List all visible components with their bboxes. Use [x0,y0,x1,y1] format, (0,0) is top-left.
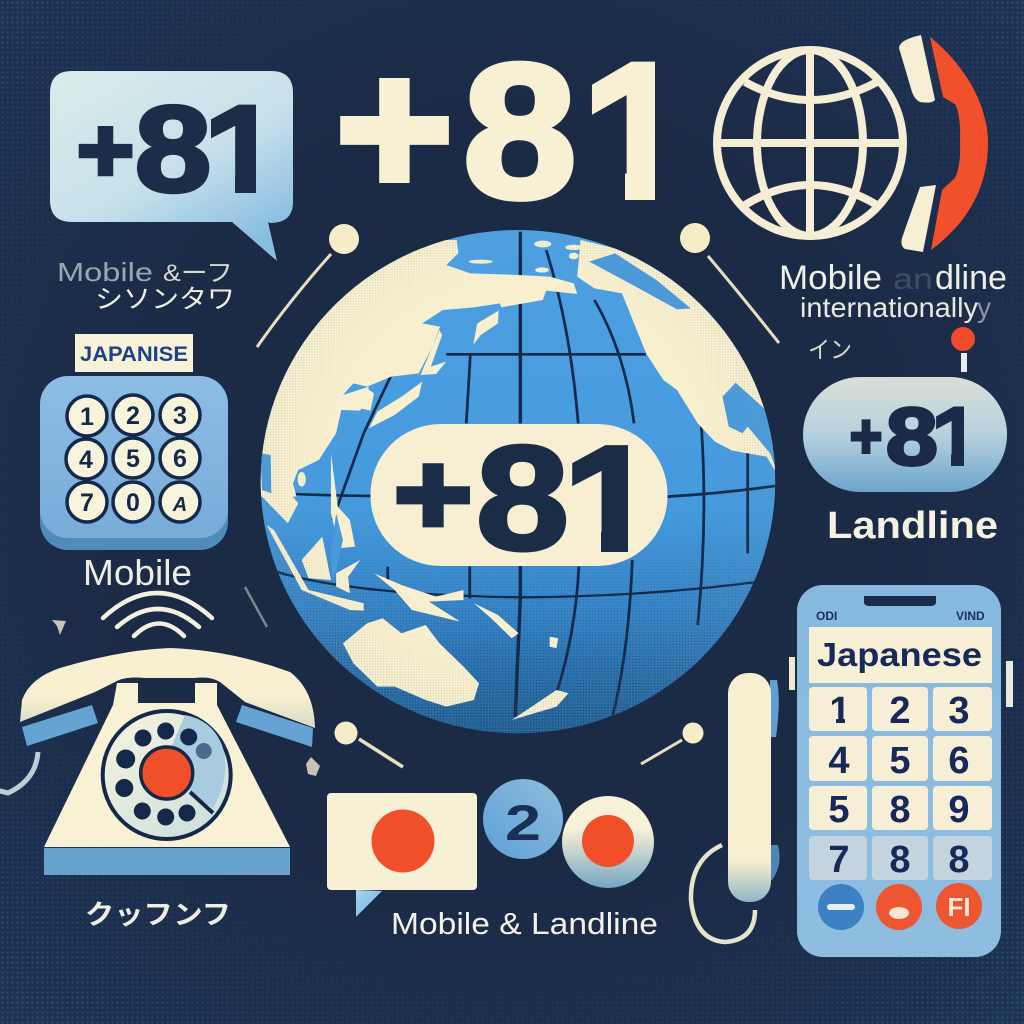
keypad digits: 1 [80,403,94,431]
grid lines [260,232,775,720]
pill number: 8 [476,416,569,581]
caption: mobile and katakana: Mobile [57,257,153,287]
keypad label: JAPANISE [80,343,188,366]
side buttons [789,657,795,690]
label: Mobile landline internationally: dline [935,259,1007,297]
flag sun [372,810,434,872]
key digits: 8 [948,839,970,881]
keypad digits: 4 [79,446,93,474]
keypad keys [66,395,200,522]
pill number: + [394,430,472,559]
pill number [850,406,964,467]
title: +81: + [336,22,453,235]
label: Landline: Landline [827,505,998,547]
bubble number: 8 [135,80,211,217]
small mark: right: イン [808,337,852,364]
pill number: 8 [886,390,938,482]
connector: bottom right [641,722,704,764]
panel: smartphone: VIND [956,609,985,623]
pill number: 1 [932,390,984,482]
screen header [809,627,992,683]
indicator: red dot [951,327,975,372]
keypad digits: 3 [173,402,187,430]
key digits: 6 [948,740,970,782]
icon: wireless signal [103,593,212,636]
keypad label [75,334,193,372]
cord [0,752,38,793]
number keys [809,687,992,880]
phone body [797,585,1001,957]
earpieces [22,705,98,746]
decorative connector: left [245,587,267,627]
badge: 2: 2 [505,795,541,851]
title: +81: 8 [463,24,577,238]
keypad body [40,390,228,550]
icon: handset receiver [691,673,780,942]
connector: top right [680,223,779,343]
keypad digits [79,402,187,517]
label: Mobile landline internationally: internationally [800,292,978,323]
icon: rotary telephone [0,648,315,875]
pill number: 1 [564,416,662,582]
blue inlets [260,253,780,583]
badge: red dot circle [562,796,654,888]
call buttons [818,883,982,930]
bubble number: 1 [204,81,285,217]
pill number: + [850,401,882,471]
keypad digits: 5 [126,445,140,473]
bubble number: + [77,99,134,200]
key digits: 1 [829,690,851,732]
key digits: 7 [828,839,850,881]
panel: landline +81 pill [803,377,1007,492]
panel: speech bubble +81 [50,71,293,261]
telephone body [44,683,290,847]
key digits [828,690,970,881]
keypad digits: 2 [126,402,140,430]
handset ends [899,35,935,103]
continents [257,240,787,720]
small mark: bottom left [306,757,320,776]
base bar [44,848,290,875]
label: Mobile landline internationally: y [977,292,991,323]
cord [691,845,755,942]
label: Mobile: Mobile [83,552,192,593]
panel: smartphone [789,585,1013,957]
small mark [52,620,66,635]
keypad digits: A [172,494,187,516]
label: Mobile landline internationally [779,259,1007,323]
caption: mobile and katakana [57,257,235,314]
key digits: 3 [948,690,970,732]
icon: wireframe globe [717,50,903,236]
label: Mobile landline internationally: an [893,263,933,296]
globe with +81 label [257,227,787,737]
caption: telephone katakana: クッフンフ [85,900,231,930]
key digits: 4 [828,740,850,782]
caption: mobile and katakana: &ーフ [163,260,233,287]
key digits: 8 [889,789,911,831]
key digits: 5 [889,740,911,782]
keypad digits: 0 [126,489,140,517]
label: Mobile & Landline: Mobile & Landline [391,906,658,941]
notch [864,596,936,606]
key digits: 5 [828,789,850,831]
icon: red phone handset [899,35,988,252]
connector: top left [257,224,359,347]
title: +81: 1 [582,24,699,238]
handset [20,648,315,728]
panel: Japan flag speech bubble [327,793,477,917]
key digits: 9 [948,789,970,831]
keypad digits: 7 [80,489,94,517]
title: +81 [340,60,655,202]
key digits: 2 [889,690,911,732]
pill number [396,444,628,552]
call buttons: FI [947,892,971,922]
connector: bottom left [334,722,403,767]
status bar: ODI [816,609,837,623]
center +81 pill [370,424,668,566]
caption: mobile and katakana: シソンタワ [95,284,235,314]
panel: Japanese keypad [40,334,228,550]
rotary dial [103,711,231,839]
label: Mobile landline internationally: Mobile [779,259,882,297]
keypad digits: 6 [173,445,187,473]
badge: 2 [483,779,563,859]
bubble number [78,104,256,194]
screen header: Japanese [817,636,982,673]
globe map [257,227,787,737]
key digits: 8 [889,839,911,881]
receiver body [728,673,771,902]
